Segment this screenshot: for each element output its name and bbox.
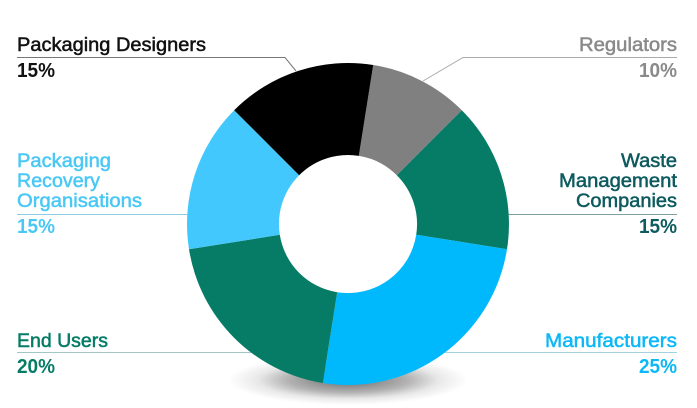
label: waste management companies: Waste [621,151,677,172]
slice: manufacturers 25% [323,235,507,385]
label: end users [17,331,108,378]
label: packaging recovery organisations: Packaging [17,151,111,172]
label: manufacturers: 25% [639,356,677,378]
label: waste management companies: Companies [576,191,677,212]
label: packaging recovery organisations: 15% [17,216,55,238]
label: regulators: 10% [639,60,677,82]
label: end users: 20% [17,356,55,378]
label: packaging recovery organisations: Organisations [17,191,142,212]
donut shadow [228,355,468,405]
leader line: manufacturers [445,352,677,354]
leader line: packaging recovery organisations [17,214,190,216]
label: waste management companies [559,151,678,238]
label: packaging designers: Packaging Designers [17,35,206,56]
label: end users: End Users [17,331,108,352]
label: manufacturers [545,331,677,378]
label: packaging designers: 15% [17,60,55,82]
label: packaging recovery organisations [17,151,142,238]
label: waste management companies: Management [559,171,678,192]
leader line: packaging designers [17,58,296,71]
leader line: waste management companies [507,214,677,216]
slice: regulators 10% [359,65,462,175]
slice: waste management companies 15% [397,110,509,249]
leader line: regulators [423,58,677,81]
slice: packaging recovery organisations 15% [187,110,299,249]
label: waste management companies: 15% [639,216,677,238]
donut chart [187,63,509,385]
label: manufacturers: Manufacturers [545,331,677,352]
label: packaging recovery organisations: Recovery [17,171,101,192]
slice: end users 20% [189,235,337,383]
label: regulators [579,35,677,82]
slice: packaging designers 15% [234,63,373,175]
label: packaging designers [17,35,206,82]
label: regulators: Regulators [579,35,677,56]
leader line: end users [17,352,255,354]
